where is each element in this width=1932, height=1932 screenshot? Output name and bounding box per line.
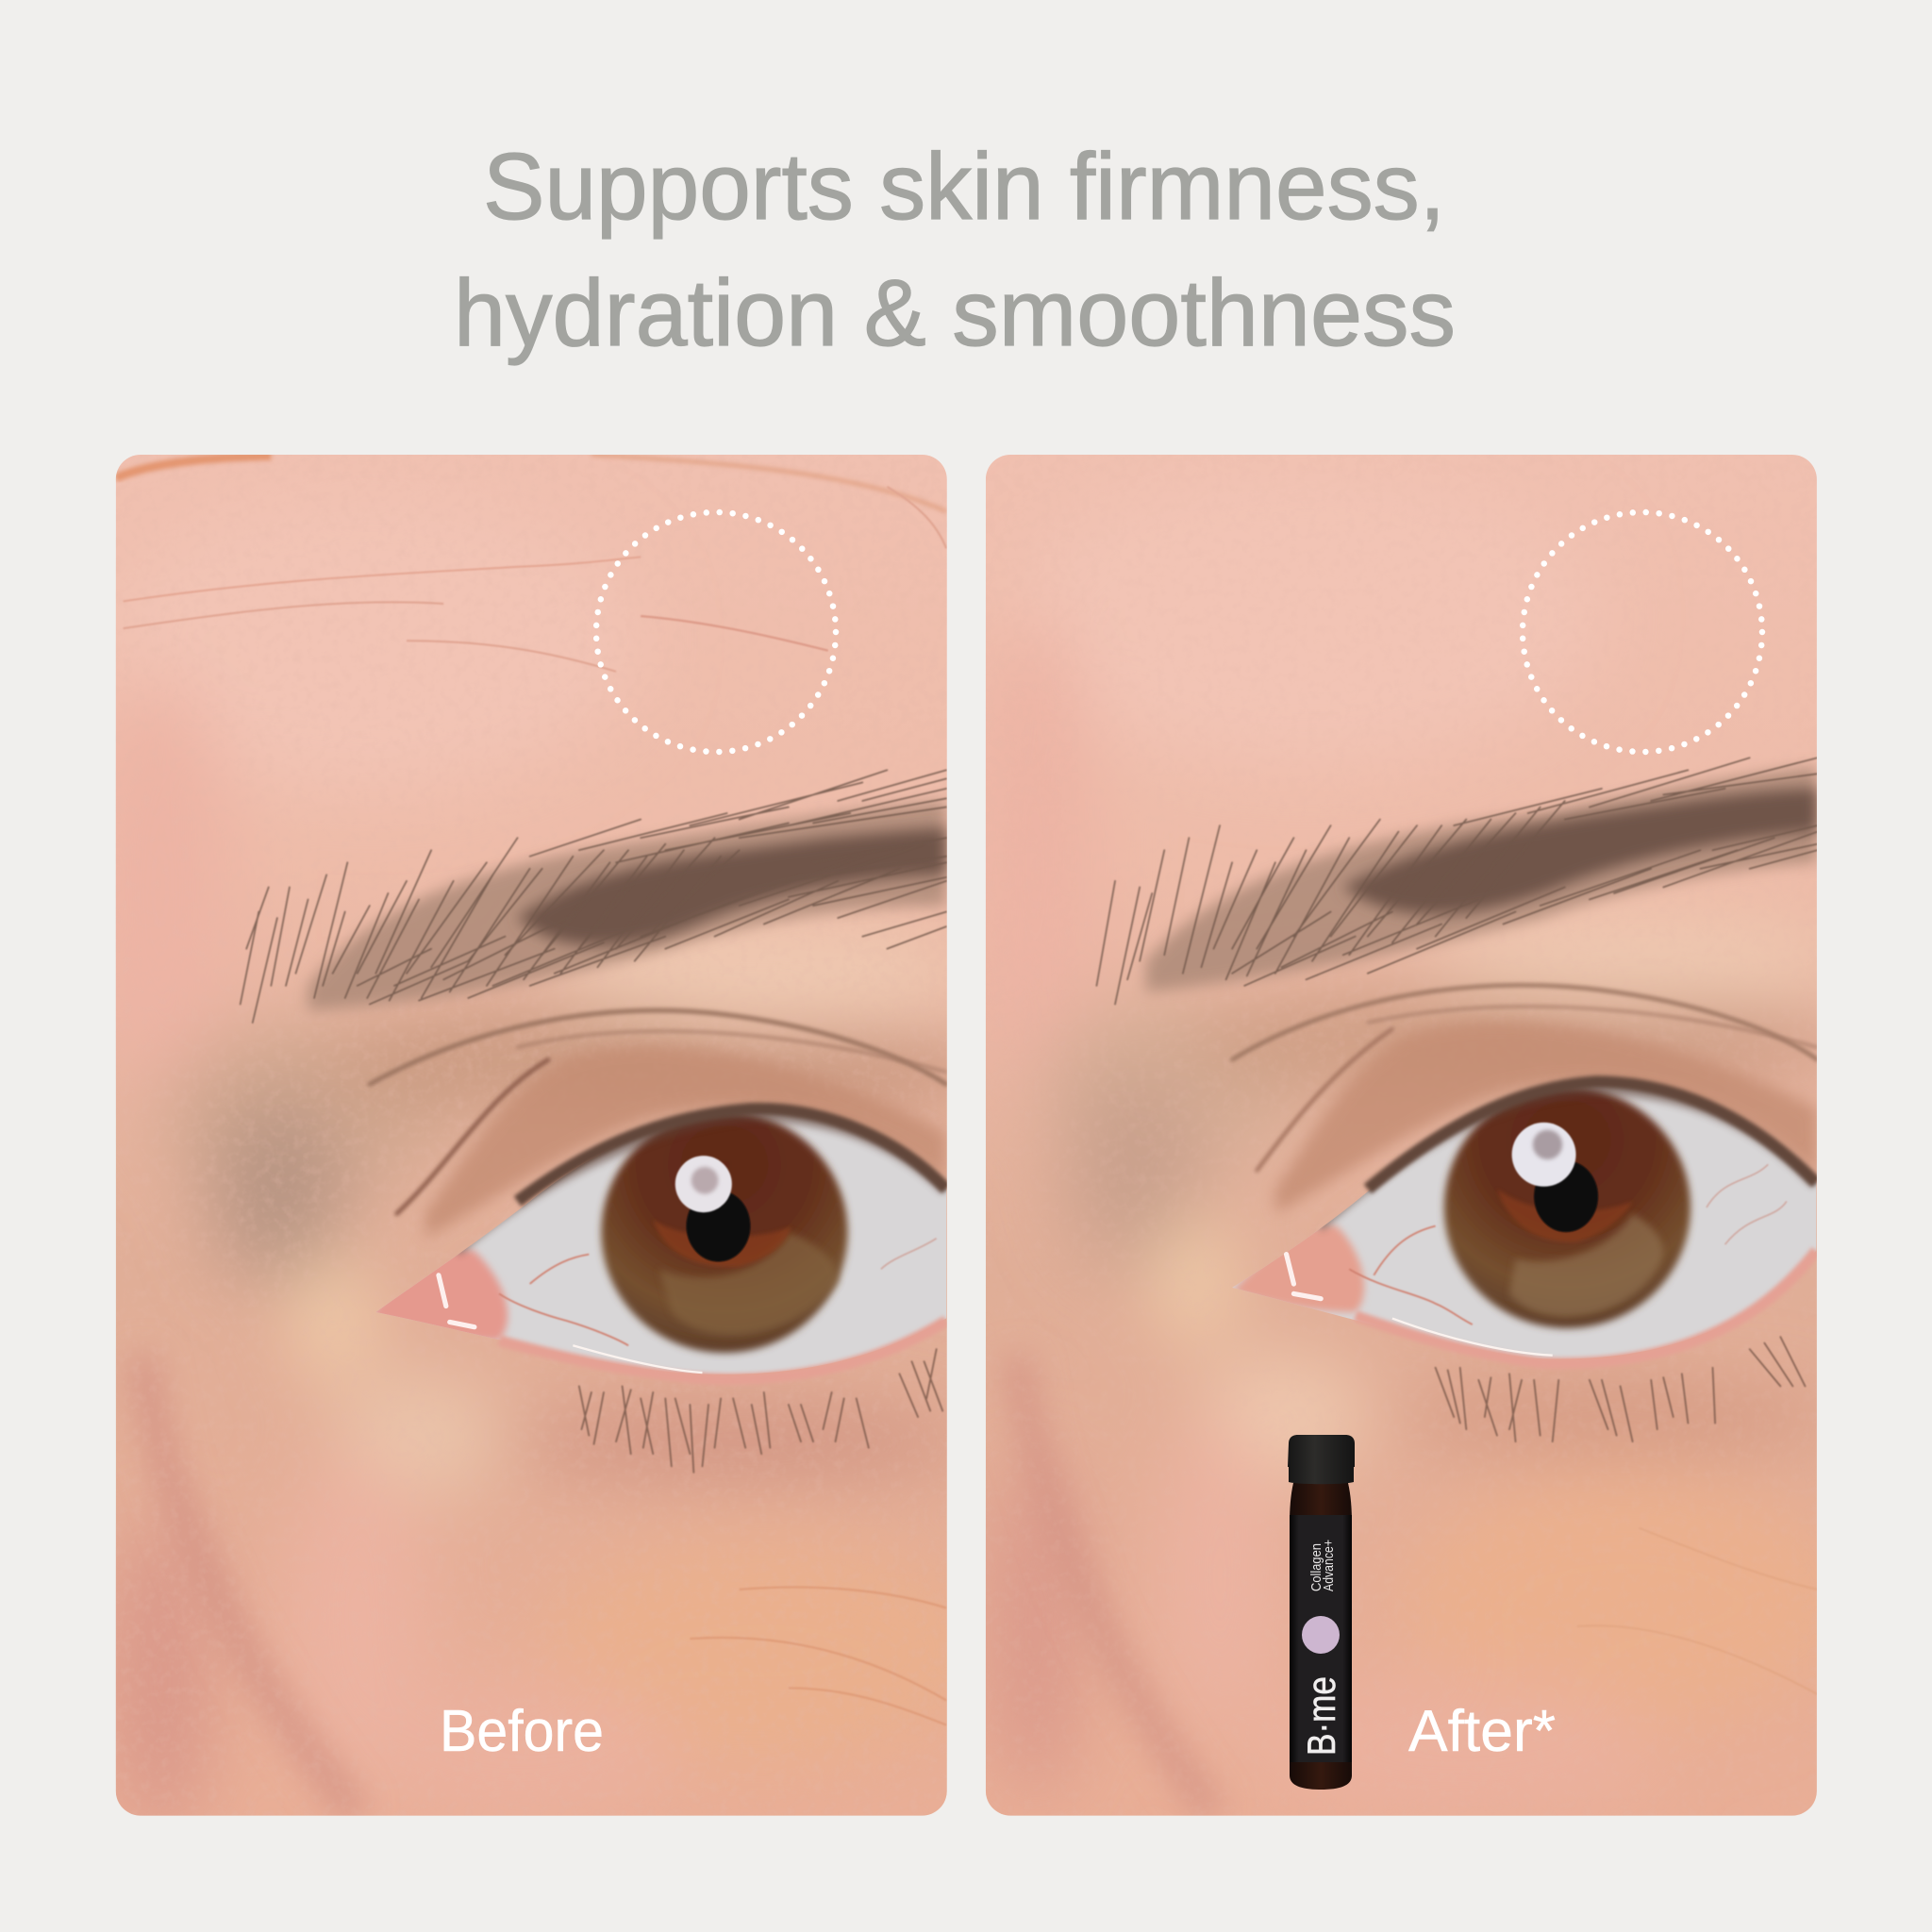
tear-line highlights	[573, 1345, 702, 1373]
caruncle	[1232, 1225, 1364, 1312]
vial cap	[1288, 1435, 1355, 1484]
under-eye creases	[690, 1587, 946, 1725]
iris	[601, 1111, 848, 1353]
title: Supports skin firmness,	[483, 134, 1445, 240]
iris	[1444, 1087, 1690, 1328]
upper lash line	[518, 1108, 946, 1201]
caruncle	[370, 1250, 508, 1341]
upper lid folds	[1232, 985, 1818, 1214]
colour dot	[1302, 1616, 1340, 1654]
vial label	[1290, 1515, 1352, 1762]
skin grain	[211, 1046, 864, 1444]
product name: Collagen	[1309, 1543, 1324, 1591]
infographic canvas	[115, 149, 1817, 1816]
pupil	[687, 1191, 750, 1261]
title: hydration & smoothness	[454, 260, 1456, 366]
veins	[1349, 1226, 1473, 1324]
under-eye creases	[1577, 1528, 1818, 1694]
eyebrow	[241, 770, 946, 1023]
vial body	[1290, 1483, 1352, 1790]
pupil	[1534, 1160, 1598, 1232]
dotted circle: before	[596, 512, 836, 752]
panel: before photo	[115, 455, 947, 1816]
eye	[1232, 1082, 1816, 1363]
catchlight	[675, 1156, 732, 1212]
label: after: After*	[1408, 1699, 1556, 1764]
product vial	[1288, 1435, 1355, 1790]
lower lid rim	[499, 1321, 946, 1379]
eyebrow	[1096, 758, 1818, 1004]
eye	[370, 1108, 946, 1379]
product name: Advance+	[1322, 1540, 1337, 1591]
title	[454, 134, 1456, 366]
brand name: B·me	[1299, 1676, 1343, 1756]
shadow beneath lid	[1319, 1089, 1816, 1226]
skin grain	[986, 455, 1818, 1816]
upper lid folds	[370, 1010, 946, 1239]
shadow beneath lid	[456, 1115, 946, 1251]
tear-line highlights	[1392, 1319, 1553, 1356]
upper lash line	[1368, 1082, 1816, 1189]
dotted circle: after	[1523, 512, 1762, 752]
lower lashes	[1436, 1337, 1805, 1441]
lower lid rim	[1356, 1251, 1816, 1363]
product name	[1309, 1540, 1337, 1591]
nose fold shadow	[142, 1356, 358, 1815]
veins	[499, 1255, 628, 1345]
catchlight	[1512, 1123, 1576, 1187]
skin tones	[115, 589, 947, 1815]
label: before: Before	[440, 1699, 604, 1764]
lower lashes	[579, 1349, 942, 1473]
panel: after photo	[974, 455, 1848, 1824]
nose fold shadow	[1017, 1356, 1214, 1815]
skin tones	[974, 468, 1848, 1824]
forehead wrinkles	[116, 455, 946, 672]
